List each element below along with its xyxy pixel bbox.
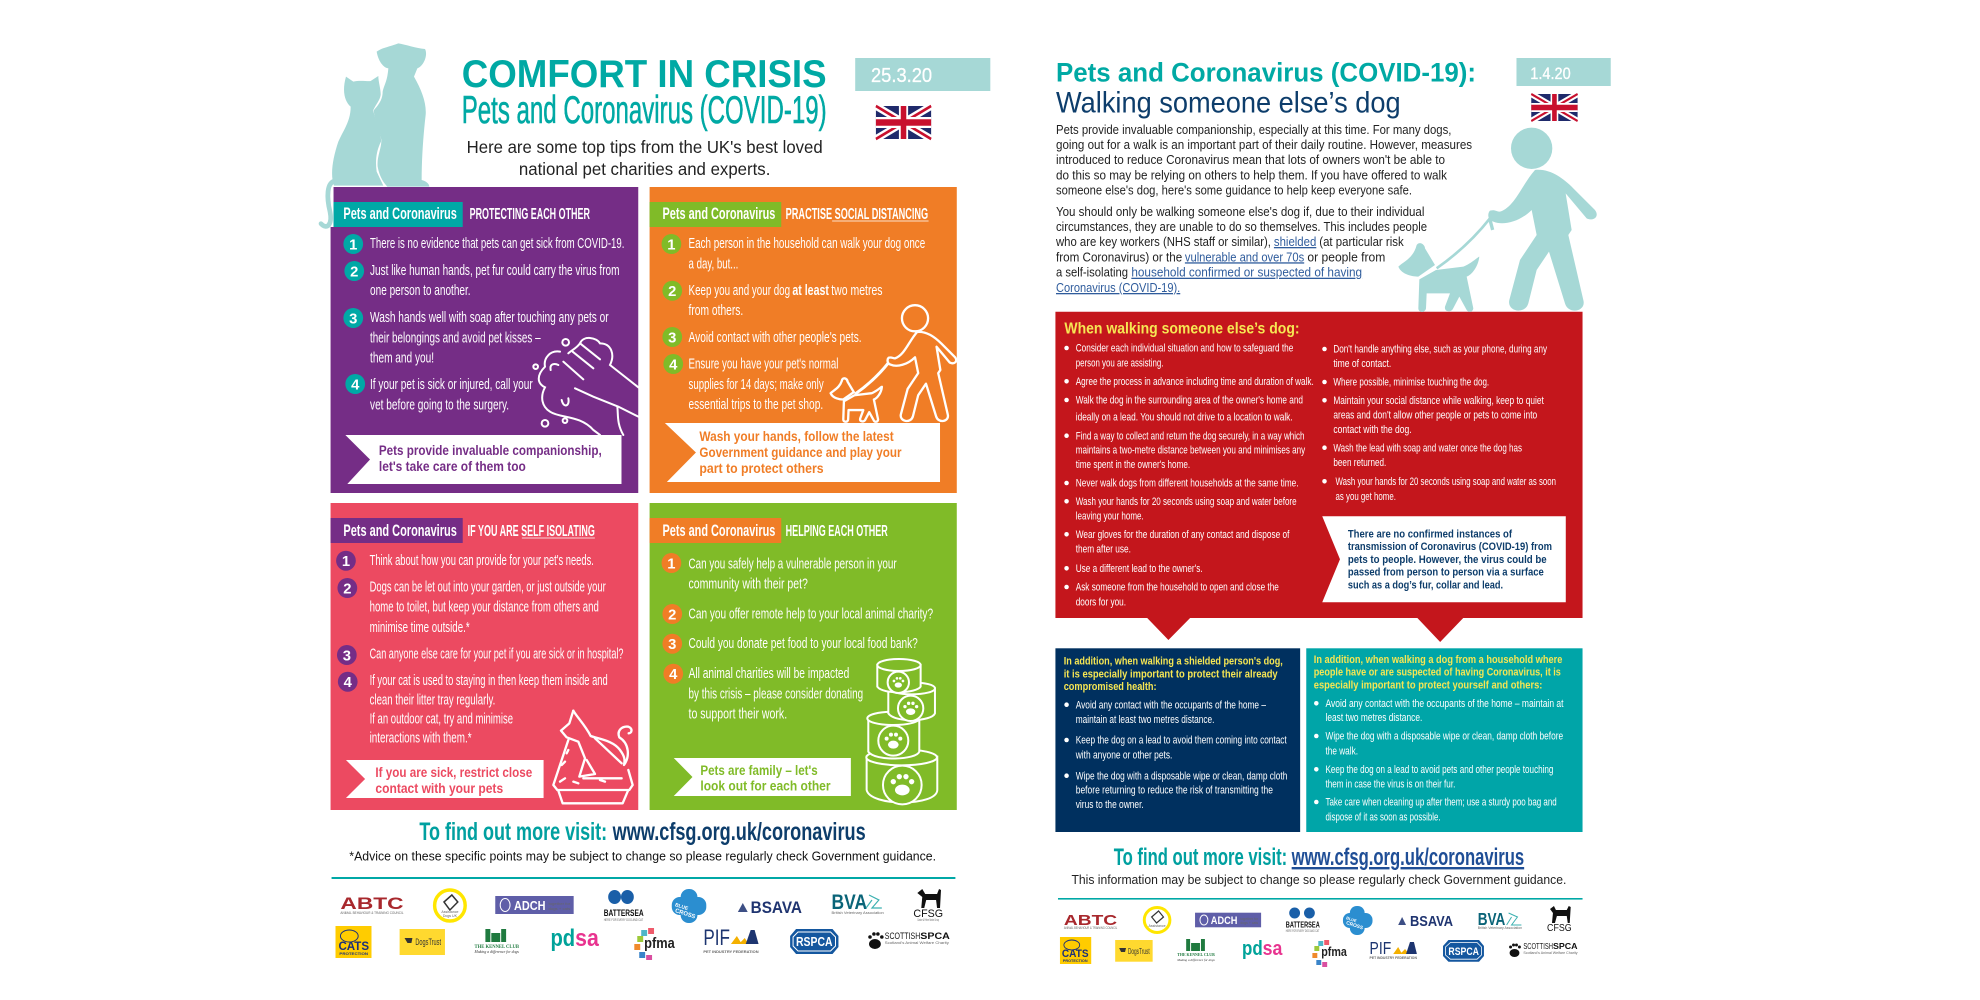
logos: charities: [1060, 906, 1578, 967]
number badges: 2: [668, 607, 676, 624]
infographic: Comfort in Crisis: [331, 53, 990, 960]
logo: PFMA: [634, 928, 675, 960]
tips list: Just like human hands, pet fur could carry the virus from: [370, 263, 620, 279]
logo: PDSA: pd: [550, 925, 575, 952]
callout: contact with your pets: [375, 781, 503, 796]
icon: stack of pet food tins: [866, 659, 937, 804]
right column advice: Maintain your social distance while walking, keep to quiet: [1333, 395, 1544, 407]
tips list: Wash hands well with soap after touching any pets or: [370, 310, 609, 326]
logo: ABTC: ANIMAL BEHAVIOUR & TRAINING COUNCIL: [340, 911, 404, 915]
guidance paragraph: a self-isolating: [1056, 265, 1128, 280]
number badges: 2: [350, 264, 358, 281]
right column advice: Wash your hands for 20 seconds using soap and water as soon: [1336, 476, 1556, 488]
heading: compromised health:: [1064, 681, 1157, 693]
bullet list: Wipe the dog with a disposable wipe or clean, damp cloth: [1076, 770, 1287, 782]
tips list: [370, 236, 624, 414]
infographic: Walking someone else's dog: [1055, 58, 1611, 967]
panel: if you are self isolating: [331, 503, 638, 810]
right column advice: Where possible, minimise touching the dog.: [1333, 377, 1489, 389]
logo: Scottish SPCA: SCOTTISH: [1523, 942, 1553, 951]
bullets: [1064, 346, 1327, 589]
logo: The Kennel Club: Making a difference for dogs: [1176, 958, 1215, 962]
left column advice: [1076, 343, 1314, 608]
tips list: supplies for 14 days; make only: [689, 377, 824, 393]
logo: Cats Protection: PROTECTION: [1063, 959, 1088, 963]
logo: PIF: PIF: [703, 925, 730, 950]
logo: CFSG: [913, 889, 943, 922]
panel: practise social distancing: [650, 187, 957, 493]
callout: If you are sick, restrict close: [375, 765, 532, 780]
logo: ABTC: [340, 894, 404, 915]
logo: ABTC: ABTC: [340, 894, 404, 913]
bullet list: Take care when cleaning up after them; use a sturdy poo bag and: [1325, 797, 1557, 809]
logo: Battersea: HERE FOR EVERY DOG AND CAT: [1286, 929, 1320, 933]
guidance paragraph: or people from: [1307, 249, 1385, 264]
logo: ADCH: together for: [549, 902, 571, 906]
callout: such as a dog’s fur, collar and lead.: [1348, 579, 1503, 591]
heading tab: HELPING EACH OTHER: [786, 523, 888, 540]
tips list: Ensure you have your pet's normal: [689, 357, 838, 373]
left column advice: them after use.: [1076, 544, 1131, 556]
intro paragraph: Pets provide invaluable companionship, especially at this time. For many dogs,: [1056, 122, 1451, 137]
bullet list: Avoid any contact with the occupants of the home – maintain at: [1325, 698, 1564, 710]
tips list: If your pet is sick or injured, call your: [370, 377, 533, 393]
date badge: [1516, 58, 1611, 86]
panel: when walking someone else's dog: [1055, 312, 1583, 642]
guidance paragraph: who are key workers (NHS staff or similar),: [1055, 234, 1271, 249]
bullet list: with anyone or other pets.: [1075, 749, 1172, 761]
logo: PIF: PET INDUSTRY FEDERATION: [1370, 956, 1417, 960]
logo: CFSG: [1547, 906, 1572, 934]
logo: BVA: BVA: [832, 891, 867, 914]
logo: ABTC: ANIMAL BEHAVIOUR & TRAINING COUNCIL: [1064, 926, 1117, 930]
right column advice: Wash the lead with soap and water once the dog has: [1333, 443, 1522, 455]
tips list: Can anyone else care for your pet if you are sick or in hospital?: [370, 647, 623, 663]
tips list: Dogs can be let out into your garden, or just outside your: [370, 580, 606, 596]
title: [1056, 58, 1476, 120]
website link: www.cfsg.org.uk/coronavirus: [1291, 844, 1524, 871]
left column advice: Find a way to collect and return the dog securely, in a way which: [1076, 430, 1304, 442]
callout: Government guidance and play your: [699, 445, 902, 460]
logo: Blue Cross: [672, 889, 706, 923]
logo: Battersea: [604, 890, 644, 922]
logo: PIF: PET INDUSTRY FEDERATION: [703, 950, 759, 954]
logo: BSAVA: BSAVA: [1410, 914, 1453, 930]
tips list: [689, 236, 925, 413]
callout: let's take care of them too: [379, 459, 526, 474]
date badge: [855, 58, 990, 91]
logo: BVA: British Veterinary Association: [1478, 926, 1522, 930]
heading: it is especially important to protect their already: [1064, 668, 1278, 680]
tips list: Avoid contact with other people's pets.: [689, 330, 862, 346]
icon: outline person walking dog: [831, 305, 956, 422]
logo: Cats Protection: [1060, 937, 1091, 964]
logo: Scottish SPCA: Scotland's Animal Welfare Charity: [1523, 951, 1578, 955]
logo: RSPCA: [1443, 940, 1484, 962]
tips list: [689, 556, 933, 723]
tips list: [370, 553, 623, 747]
date badge: 1.4.20: [1530, 64, 1571, 83]
left column advice: Never walk dogs from different households at the same time.: [1076, 478, 1299, 490]
tips list: one person to another.: [370, 283, 471, 299]
logo: The Kennel Club: THE KENNEL CLUB: [475, 945, 520, 950]
logo: Blue Cross: [1343, 906, 1373, 935]
left column advice: doors for you.: [1076, 596, 1126, 608]
callout: [345, 435, 621, 484]
logo: ABTC: ABTC: [1064, 913, 1117, 929]
tips list: Could you donate pet food to your local food bank?: [689, 636, 918, 652]
logo: RSPCA: [790, 929, 838, 954]
tips list: from others.: [689, 303, 743, 319]
intro paragraph: going out for a walk is an important part of their daily routine. However, measures: [1056, 137, 1472, 152]
panel: household with coronavirus: [1306, 648, 1583, 832]
website link: To find out more visit:: [1114, 844, 1287, 871]
number badges: [343, 234, 365, 394]
tips list: All animal charities will be impacted: [689, 666, 849, 682]
number badges: 3: [349, 311, 357, 328]
logo: PDSA: [1242, 938, 1283, 960]
number badges: 4: [669, 357, 678, 374]
right column advice: contact with the dog.: [1333, 424, 1412, 436]
logo: Scottish SPCA: [868, 931, 951, 949]
tips list: Can you safely help a vulnerable person in your: [689, 556, 897, 572]
number badges: 1: [342, 554, 350, 570]
callout: There are no confirmed instances of: [1348, 528, 1512, 540]
bullet list: [1064, 699, 1287, 811]
bullet list: Keep the dog on a lead to avoid them coming into contact: [1076, 735, 1287, 747]
panel: helping each other: [650, 503, 957, 810]
logo: PFMA: pfma: [1321, 944, 1348, 959]
logo: Assistance Dogs UK: Assistance: [441, 910, 458, 914]
number badges: 1: [667, 237, 675, 254]
logo: Scottish SPCA: SPCA: [920, 931, 951, 941]
bullet list: before returning to reduce the risk of transmitting the: [1076, 785, 1273, 797]
intro text: [467, 137, 823, 179]
callout: [1322, 516, 1566, 602]
tips list: them and you!: [370, 351, 434, 367]
heading: When walking someone else’s dog:: [1064, 320, 1300, 337]
logo: PDSA: [550, 925, 599, 952]
logo: Scottish SPCA: SPCA: [1553, 942, 1578, 951]
left column advice: Wear gloves for the duration of any contact and dispose of: [1076, 529, 1290, 541]
disclaimer: *Advice on these specific points may be subject to change so please regularly check Government guidance.: [349, 849, 936, 864]
logo: Assistance Dogs UK: [435, 890, 465, 921]
number badges: 2: [668, 284, 676, 300]
bullet list: dispose of it as soon as possible.: [1325, 811, 1441, 823]
heading: [1314, 654, 1562, 691]
logo: BSAVA: BSAVA: [751, 898, 802, 917]
logo: Blue Cross: CROSS: [1345, 920, 1364, 932]
tips list: There is no evidence that pets can get sick from COVID-19.: [370, 236, 624, 252]
right column advice: [1333, 344, 1556, 503]
logo: Cats Protection: PROTECTION: [339, 951, 368, 956]
number badges: 2: [343, 581, 351, 598]
bullet list: maintain at least two metres distance.: [1076, 714, 1214, 726]
icon: cat in litter tray: [553, 711, 633, 803]
icon: UK flag: [1531, 94, 1578, 121]
intro text: Here are some top tips from the UK's best loved: [467, 137, 823, 157]
logo: PIF: PIF: [1370, 938, 1391, 958]
left column advice: Agree the process in advance including time and duration of walk.: [1076, 376, 1314, 388]
logo: Dogs Trust: [400, 929, 445, 955]
heading tab: Pets and Coronavirus: [663, 204, 775, 223]
guidance paragraph: vulnerable and over 70s: [1185, 249, 1304, 264]
guidance paragraph: [1055, 204, 1427, 295]
intro paragraph: [1056, 122, 1472, 197]
logo: ADCH: ADCH: [1211, 915, 1238, 927]
website link: To find out more visit:: [419, 819, 607, 846]
bullet list: them in case the virus is on their fur.: [1325, 778, 1455, 790]
number badges: 1: [349, 237, 357, 254]
title: COMFORT IN CRISIS: [462, 53, 827, 96]
heading tab: PROTECTING EACH OTHER: [470, 206, 590, 223]
heading: In addition, when walking a dog from a household where: [1314, 654, 1562, 666]
tips list: If an outdoor cat, try and minimise: [370, 712, 513, 728]
logo: RSPCA: RSPCA: [796, 934, 833, 949]
tips list: minimise time outside.*: [370, 620, 470, 636]
right column advice: as you get home.: [1336, 491, 1396, 503]
title: Pets and Coronavirus (COVID-19): [462, 89, 827, 132]
logo: PFMA: pfma: [644, 936, 675, 952]
logo: PIF: [703, 925, 759, 954]
number badges: [336, 551, 358, 692]
heading tab: [334, 202, 590, 227]
left column advice: Wash your hands for 20 seconds using soap and water before: [1076, 496, 1297, 508]
tips list: Each person in the household can walk your dog once: [689, 236, 925, 252]
guidance paragraph: circumstances, they are unable to do so themselves. This includes people: [1056, 219, 1427, 234]
guidance paragraph: (at particular risk: [1319, 234, 1404, 249]
icon: cat and dog silhouette: [321, 43, 429, 226]
number badges: 3: [343, 648, 351, 665]
callout: pets to people. However, the virus could be: [1348, 554, 1547, 566]
logo: Cats Protection: CATS: [338, 939, 369, 953]
callout: look out for each other: [700, 779, 831, 794]
bullet list: Avoid any contact with the occupants of the home –: [1076, 699, 1267, 711]
logo: The Kennel Club: THE KENNEL CLUB: [1177, 952, 1215, 957]
logo: ADCH: ADCH: [514, 898, 546, 913]
heading: [1064, 656, 1283, 693]
logo: BVA: British Veterinary Association: [832, 911, 884, 915]
logo: Cats Protection: CATS: [1062, 948, 1089, 960]
tips list: home to toilet, but keep your distance from others and: [370, 600, 599, 616]
heading tab: Pets and Coronavirus: [343, 521, 457, 540]
left column advice: ideally on a lead. You should not drive to a location to walk.: [1076, 411, 1293, 423]
intro text: national pet charities and experts.: [519, 159, 770, 179]
callout: passed from person to person via a surface: [1348, 567, 1544, 579]
number badges: 3: [668, 330, 676, 347]
heading tab: Pets and Coronavirus: [663, 521, 775, 540]
bullet list: least two metres distance.: [1325, 712, 1422, 724]
logos: charities: [336, 889, 951, 960]
logo: PFMA: [1312, 940, 1348, 967]
panel: protecting each other: [331, 187, 638, 493]
right column advice: time of contact.: [1333, 358, 1391, 370]
guidance paragraph: from Coronavirus) or the: [1056, 249, 1182, 264]
heading tab: [650, 518, 888, 543]
callout: part to protect others: [699, 461, 824, 476]
callout: [674, 758, 851, 796]
logo: Blue Cross: CROSS: [674, 908, 696, 920]
tips list: at least: [792, 283, 829, 299]
heading: In addition, when walking a shielded person's dog,: [1064, 656, 1283, 668]
logo: Dogs Trust: DogsTrust: [415, 937, 441, 947]
logo: Dogs Trust: [1115, 940, 1153, 962]
heading tab: IF YOU ARE SELF ISOLATING: [468, 523, 595, 540]
number badges: 4: [351, 377, 360, 394]
logo: ADCH: [495, 896, 574, 914]
callout: Wash your hands, follow the latest: [699, 429, 894, 444]
intro paragraph: do this so may be relying on others to help them. If you have offered to walk: [1056, 167, 1447, 182]
bullet list: Wipe the dog with a disposable wipe or clean, damp cloth before: [1325, 731, 1563, 743]
logo: CFSG: CFSG: [1547, 923, 1572, 934]
logo: Cats Protection: [336, 926, 371, 958]
logo: Blue Cross: BLUE: [1346, 915, 1358, 923]
tips list: vet before going to the surgery.: [370, 398, 509, 414]
logo: PDSA: sa: [575, 925, 599, 952]
heading tab: [331, 518, 595, 543]
logo: Blue Cross: BLUE: [674, 902, 689, 912]
logo: BVA: BVA: [1478, 909, 1505, 929]
logo: PIF: [1370, 938, 1417, 960]
right column advice: been returned.: [1333, 457, 1386, 469]
logo: Assistance Dogs UK: [1144, 908, 1170, 932]
tips list: by this crisis – please consider donating: [689, 686, 863, 702]
tips list: Think about how you can provide for your pet's needs.: [370, 553, 594, 569]
number badges: [662, 234, 683, 374]
icon: UK flag: [876, 106, 931, 139]
logo: Assistance Dogs UK: Dogs UK: [443, 914, 458, 918]
logo: CFSG: CFSG: [913, 908, 943, 920]
callout: Pets are family – let's: [700, 763, 818, 778]
intro paragraph: introduced to reduce Coronavirus mean that lots of owners won't be able to: [1056, 152, 1445, 167]
right column advice: areas and don't allow other people or pets to come into: [1333, 410, 1537, 422]
number badges: [662, 553, 683, 684]
callout: [346, 760, 544, 798]
logo: ADCH: dogs + cats: [1240, 921, 1258, 925]
callout: transmission of Coronavirus (COVID-19) from: [1348, 541, 1552, 553]
number badges: 4: [669, 667, 678, 683]
logo: PDSA: pd: [1242, 938, 1263, 960]
website link: [1114, 844, 1524, 871]
number badges: 4: [344, 675, 353, 691]
tips list: a day, but...: [689, 257, 738, 273]
left column advice: maintains a two-metre distance between you and minimises any: [1076, 445, 1305, 457]
date badge: 25.3.20: [871, 65, 932, 87]
panel: shielded person's dog: [1055, 648, 1300, 832]
tips list: their belongings and avoid pet kisses –: [370, 330, 541, 346]
logo: Battersea: HERE FOR EVERY DOG AND CAT: [604, 918, 644, 922]
logo: Dogs Trust: DogsTrust: [1128, 947, 1150, 956]
callout: Pets provide invaluable companionship,: [379, 443, 602, 458]
heading tab: [650, 202, 929, 227]
left column advice: leaving your home.: [1076, 511, 1144, 523]
heading tab: PRACTISE SOCIAL DISTANCING: [786, 206, 928, 223]
logo: The Kennel Club: [1176, 939, 1215, 962]
tips list: community with their pet?: [689, 577, 808, 593]
left column advice: time spent in the owner's home.: [1076, 459, 1190, 471]
heading tab: Pets and Coronavirus: [343, 204, 457, 223]
tips list: Keep you and your dog: [689, 283, 790, 299]
tips list: interactions with them.*: [370, 731, 472, 747]
title: Walking someone else’s dog: [1056, 87, 1401, 120]
tips list: Can you offer remote help to your local animal charity?: [689, 606, 933, 622]
logo: Scottish SPCA: Scotland's Animal Welfare Charity: [885, 941, 949, 945]
tips list: to support their work.: [689, 707, 787, 723]
guidance paragraph: Coronavirus (COVID-19).: [1056, 280, 1180, 295]
left column advice: Ask someone from the household to open and close the: [1076, 582, 1279, 594]
tips list: two metres: [831, 283, 883, 299]
title: Pets and Coronavirus (COVID-19):: [1056, 58, 1476, 88]
disclaimer: This information may be subject to change so please regularly check Government guidance.: [1071, 872, 1566, 887]
intro paragraph: someone else's dog, here's some guidance to help keep everyone safe.: [1056, 182, 1412, 197]
bullet list: [1314, 698, 1564, 823]
logo: Battersea: BATTERSEA: [604, 908, 644, 918]
bullet list: the walk.: [1325, 745, 1358, 757]
logo: CFSG: Canine & Feline Sector Group: [917, 918, 939, 922]
guidance paragraph: You should only be walking someone else's dog if, due to their individual: [1056, 204, 1424, 219]
guidance paragraph: shielded: [1274, 234, 1316, 249]
title: [462, 53, 827, 132]
tips list: If your cat is used to staying in then keep them inside and: [370, 673, 608, 689]
left column advice: Consider each individual situation and how to safeguard the: [1076, 343, 1293, 355]
tips list: clean their litter tray regularly.: [370, 693, 495, 709]
logo: Battersea: BATTERSEA: [1286, 920, 1320, 930]
website link: www.cfsg.org.uk/coronavirus: [612, 819, 866, 846]
logo: ADCH: together for: [1240, 917, 1259, 921]
logo: ADCH: dogs + cats: [549, 907, 570, 911]
bullet list: virus to the owner.: [1076, 799, 1144, 811]
number badges: 1: [667, 556, 675, 573]
heading: especially important to protect yourself and others:: [1314, 679, 1542, 691]
left column advice: Use a different lead to the owner's.: [1076, 563, 1203, 575]
logo: Assistance Dogs UK: Assistance: [1149, 924, 1166, 928]
callout: [665, 423, 940, 482]
logo: PDSA: sa: [1263, 938, 1283, 960]
logo: The Kennel Club: [474, 929, 520, 954]
logo: The Kennel Club: Making a difference for dogs: [474, 950, 519, 954]
left column advice: person you are assisting.: [1076, 357, 1163, 369]
guidance paragraph: household confirmed or suspected of having: [1131, 265, 1362, 280]
website link: [419, 819, 866, 846]
logo: RSPCA: RSPCA: [1448, 946, 1479, 958]
icon: washing hands: [533, 338, 638, 435]
logo: Scottish SPCA: [1509, 942, 1578, 957]
right column advice: Don't handle anything else, such as your phone, during any: [1333, 344, 1547, 356]
logo: ADCH: [1195, 913, 1261, 927]
number badges: 3: [668, 637, 676, 653]
logo: Battersea: [1286, 908, 1320, 933]
tips list: essential trips to the pet shop.: [689, 397, 823, 413]
logo: Scottish SPCA: SCOTTISH: [885, 931, 920, 941]
bullet list: Keep the dog on a lead to avoid pets and other people touching: [1325, 764, 1553, 776]
left column advice: Walk the dog in the surrounding area of the owner's home and: [1076, 395, 1303, 407]
icon: person walking dog silhouette: [1398, 128, 1597, 312]
heading: people have or are suspected of having Coronavirus, it is: [1314, 667, 1561, 679]
